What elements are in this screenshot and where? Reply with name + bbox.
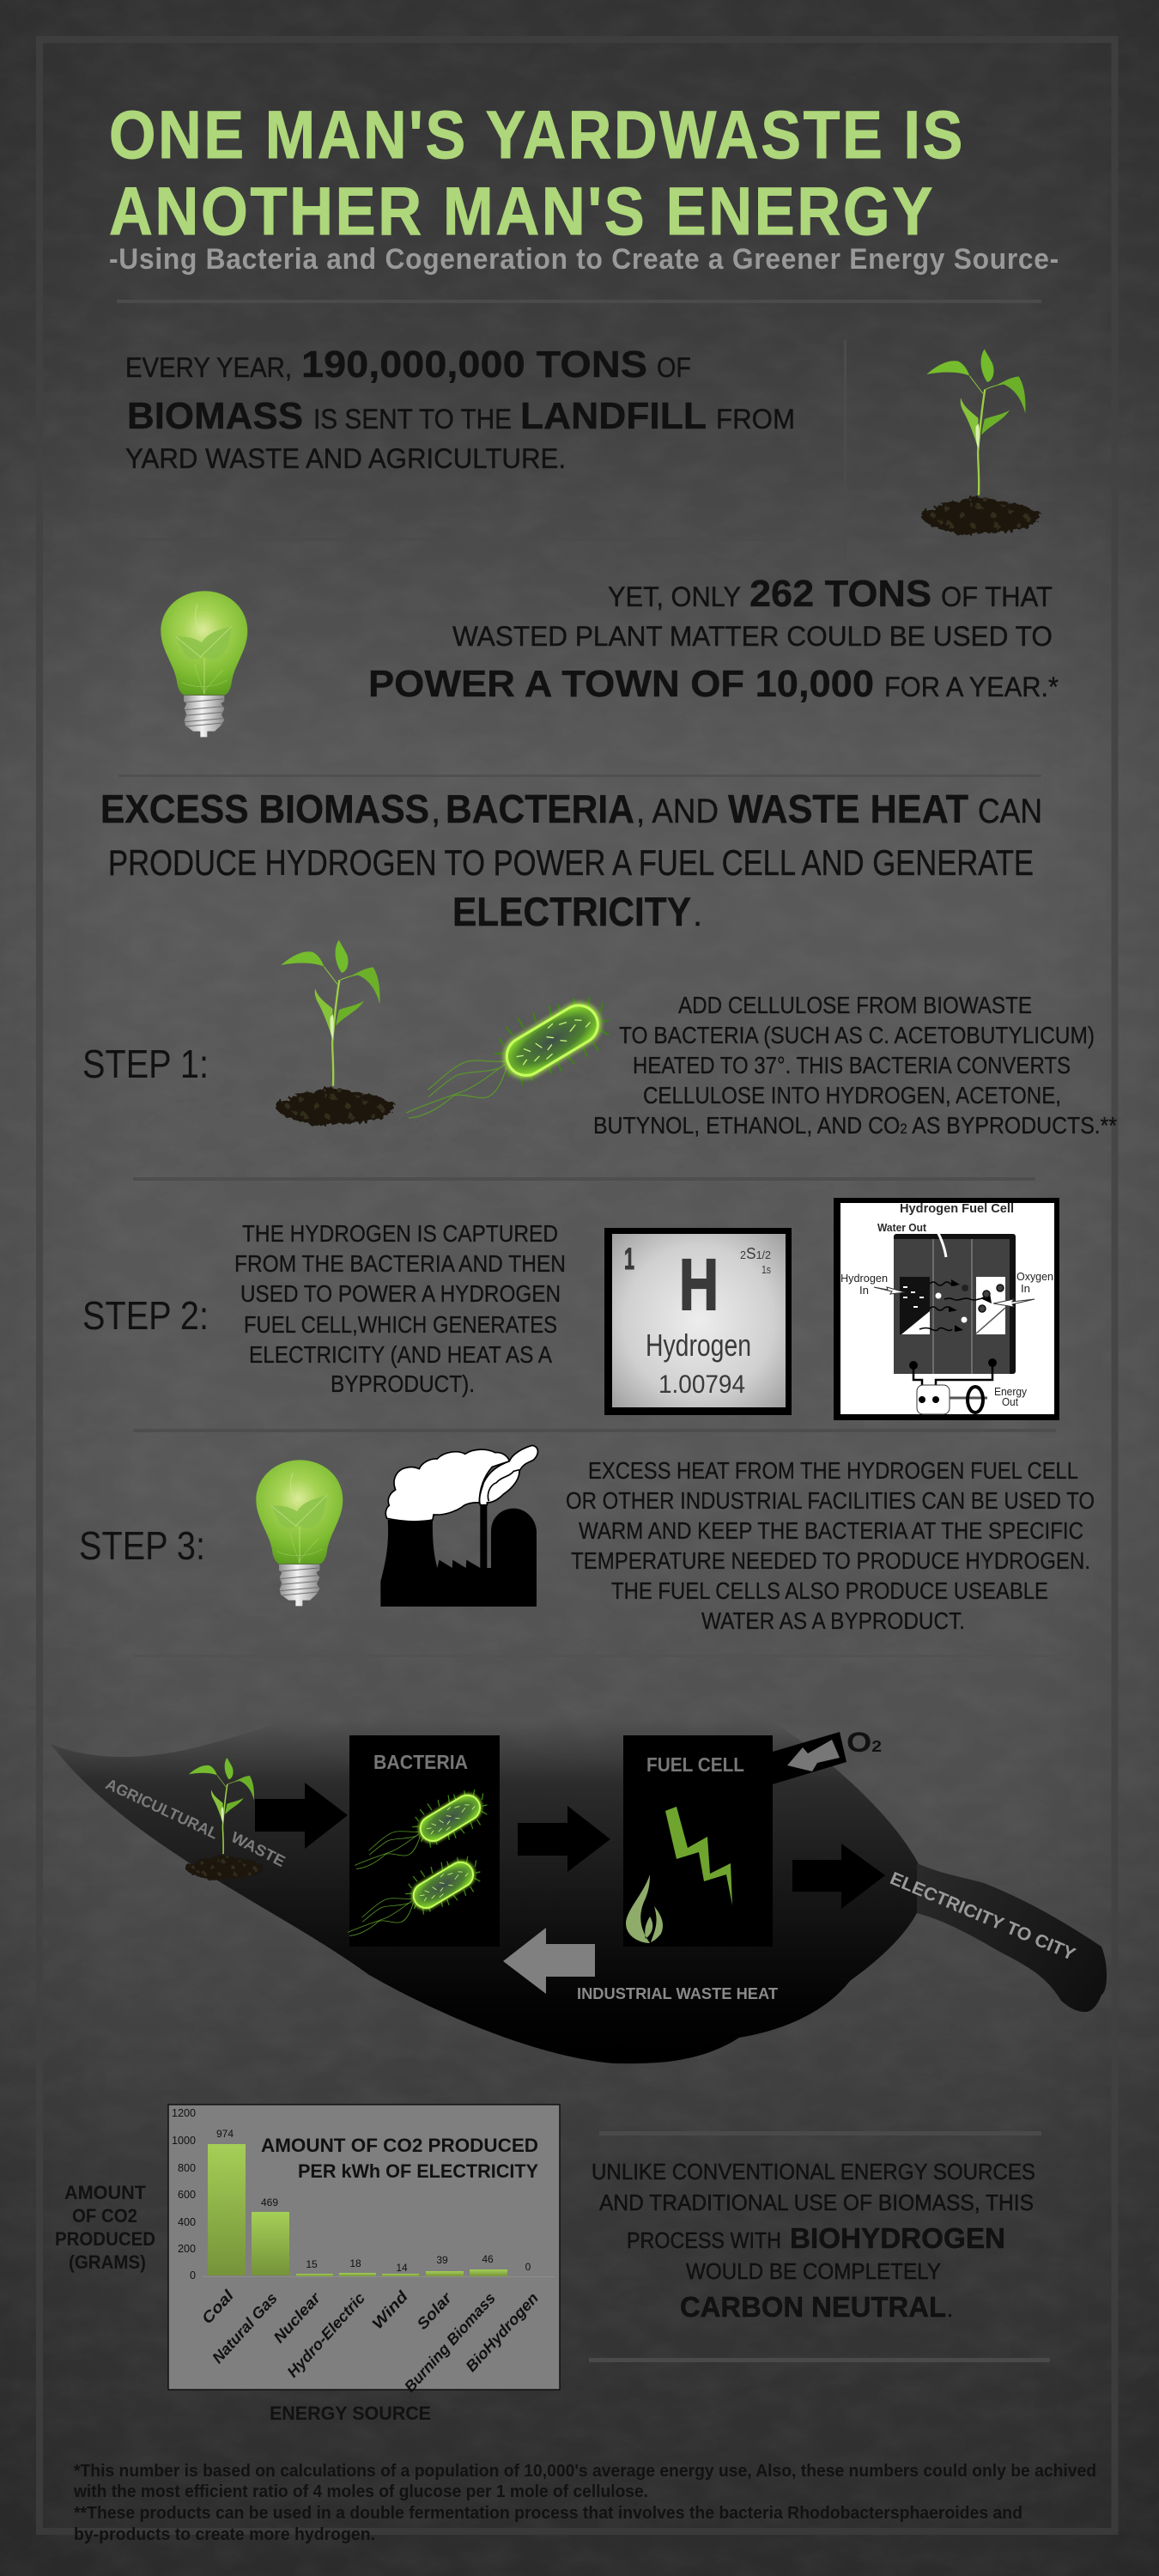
step 2 text: FROM THE BACTERIA AND THEN bbox=[234, 1250, 566, 1277]
footnotes: *This number is based on calculations of a population of 10,000's average energy use, Also, these numbers could only be achived bbox=[74, 2462, 1096, 2481]
text block: landfill statistic: 190,000,000 TONS bbox=[301, 343, 647, 386]
y axis label: OF CO2 bbox=[72, 2205, 137, 2227]
heading: process summary bbox=[100, 787, 1042, 934]
value labels: 974 bbox=[216, 2128, 234, 2140]
text block: landfill statistic: IS SENT TO THE bbox=[313, 404, 512, 434]
label: agricultural waste bbox=[103, 1775, 288, 1870]
icon: seedling on leaf bbox=[185, 1758, 264, 1880]
step 1 label: STEP 1: bbox=[82, 1042, 209, 1086]
icon: bacterium bbox=[406, 994, 609, 1118]
title: ONE MAN'S YARDWASTE IS bbox=[109, 96, 965, 173]
text block: 262 tons statistic: FOR A YEAR.* bbox=[884, 671, 1059, 702]
bar chart: CO2 per kWh bbox=[168, 2105, 560, 2396]
oxygen inlet bbox=[773, 1727, 882, 1784]
hydrogen fuel cell diagram: Oxygen bbox=[1016, 1270, 1053, 1283]
y axis label: (GRAMS) bbox=[69, 2251, 146, 2273]
text block: 262 tons statistic bbox=[368, 573, 1059, 705]
step 3 text: THE FUEL CELLS ALSO PRODUCE USEABLE bbox=[611, 1577, 1048, 1604]
heading: process summary: , AND bbox=[636, 793, 719, 830]
text block: 262 tons statistic: WASTED PLANT MATTER COULD BE USED TO bbox=[452, 621, 1053, 652]
heading: process summary: EXCESS BIOMASS bbox=[100, 787, 429, 831]
oxygen inlet: O2 bbox=[846, 1727, 882, 1758]
step 2 text bbox=[234, 1220, 566, 1397]
chart title: PER kWh OF ELECTRICITY bbox=[298, 2160, 538, 2182]
step 1 text: BUTYNOL, ETHANOL, AND CO2 AS BYPRODUCTS.** bbox=[593, 1112, 1117, 1139]
icon: green light bulb bbox=[161, 591, 247, 737]
subtitle: -Using Bacteria and Cogeneration to Create a Greener Energy Source- bbox=[109, 243, 1059, 276]
hydrogen fuel cell diagram: In bbox=[1021, 1282, 1030, 1295]
footnotes: by-products to create more hydrogen. bbox=[74, 2525, 375, 2544]
value labels: 469 bbox=[261, 2196, 278, 2208]
text block: landfill statistic: YARD WASTE AND AGRICULTURE. bbox=[125, 443, 566, 474]
axis ticks: 400 bbox=[178, 2215, 196, 2228]
leaf stem bbox=[917, 1863, 1107, 2012]
axis ticks: 1000 bbox=[172, 2134, 196, 2147]
hydrogen fuel cell diagram: Energy bbox=[994, 1385, 1027, 1398]
step 1 text: HEATED TO 37°. THIS BACTERIA CONVERTS bbox=[633, 1052, 1071, 1078]
value labels: 46 bbox=[482, 2253, 494, 2265]
step 1 text: CELLULOSE INTO HYDROGEN, ACETONE, bbox=[643, 1082, 1061, 1109]
category labels bbox=[198, 2286, 542, 2396]
step 3 text: TEMPERATURE NEEDED TO PRODUCE HYDROGEN. bbox=[571, 1547, 1090, 1574]
category labels: Natural Gas bbox=[209, 2289, 281, 2366]
footnotes: **These products can be used in a double fermentation process that involves the bacteria Rhodobactersphaeroides and bbox=[74, 2504, 1022, 2523]
icon: factory with smoke bbox=[380, 1445, 537, 1607]
panel: bacteria: BACTERIA bbox=[373, 1751, 468, 1773]
category labels: Wind bbox=[368, 2287, 412, 2332]
step 2 text: FUEL CELL,WHICH GENERATES bbox=[244, 1311, 557, 1338]
category labels: Hydro-Electric bbox=[283, 2289, 368, 2381]
footnotes bbox=[73, 2462, 1096, 2544]
text block: landfill statistic: LANDFILL bbox=[520, 395, 707, 437]
label: industrial waste heat: INDUSTRIAL WASTE HEAT bbox=[577, 1985, 778, 2002]
heading: process summary: . bbox=[693, 896, 702, 933]
step 2 label: STEP 2: bbox=[82, 1293, 209, 1338]
text block: 262 tons statistic: POWER A TOWN OF 10,000 bbox=[368, 663, 874, 705]
label: agricultural waste: AGRICULTURAL bbox=[103, 1775, 221, 1843]
hydrogen periodic table tile: 2S1/2 bbox=[740, 1245, 771, 1262]
value labels bbox=[216, 2128, 531, 2274]
y axis label bbox=[55, 2182, 155, 2273]
hydrogen periodic table tile: H bbox=[679, 1244, 719, 1325]
value labels: 18 bbox=[349, 2257, 361, 2269]
arrow: industrial waste heat bbox=[503, 1928, 595, 1994]
hydrogen fuel cell diagram: In bbox=[859, 1284, 869, 1297]
text block: carbon neutral: AND TRADITIONAL USE OF BIOMASS, THIS bbox=[599, 2190, 1034, 2215]
footnotes: with the most efficient ratio of 4 moles of glucose per 1 mole of cellulose. bbox=[73, 2482, 648, 2501]
hydrogen periodic table tile: 1.00794 bbox=[658, 1370, 745, 1399]
hydrogen periodic table tile: 1s bbox=[762, 1263, 771, 1276]
heading: process summary: CAN bbox=[978, 793, 1042, 830]
panel: fuel cell: FUEL CELL bbox=[646, 1753, 744, 1776]
heading: process summary: WASTE HEAT bbox=[728, 787, 968, 831]
value labels: 0 bbox=[525, 2261, 531, 2273]
text block: 262 tons statistic: YET, ONLY bbox=[608, 581, 741, 612]
text block: 262 tons statistic: OF THAT bbox=[941, 581, 1053, 612]
text block: landfill statistic: FROM bbox=[716, 404, 795, 434]
step 2 text: BYPRODUCT). bbox=[331, 1370, 475, 1397]
step 3 text bbox=[566, 1457, 1095, 1634]
category labels: Coal bbox=[198, 2286, 238, 2327]
hydrogen fuel cell diagram bbox=[834, 1198, 1059, 1420]
hydrogen periodic table tile: 1 bbox=[624, 1242, 634, 1276]
category labels: BioHydrogen bbox=[462, 2289, 542, 2375]
text block: carbon neutral: BIOHYDROGEN bbox=[790, 2222, 1005, 2254]
heading: process summary: BACTERIA bbox=[446, 787, 634, 831]
label: electricity to city: ELECTRICITY TO CITY bbox=[887, 1868, 1078, 1965]
text block: landfill statistic: OF bbox=[657, 352, 691, 383]
axis ticks: 0 bbox=[190, 2269, 196, 2281]
y axis label: PRODUCED bbox=[55, 2228, 155, 2250]
category labels: Burning Biomass bbox=[401, 2289, 499, 2396]
hydrogen fuel cell diagram: Hydrogen bbox=[840, 1272, 888, 1285]
text block: carbon neutral: PROCESS WITH bbox=[627, 2227, 781, 2253]
x axis label: ENERGY SOURCE bbox=[270, 2403, 431, 2424]
heading: process summary: ELECTRICITY bbox=[452, 889, 691, 934]
step 3 text: WATER AS A BYPRODUCT. bbox=[701, 1607, 965, 1634]
step 3 text: EXCESS HEAT FROM THE HYDROGEN FUEL CELL bbox=[588, 1457, 1078, 1484]
category labels: Solar bbox=[414, 2288, 456, 2333]
arrow: bacteria to fuel cell bbox=[518, 1806, 610, 1872]
step 1 text bbox=[593, 992, 1117, 1139]
title: ANOTHER MAN'S ENERGY bbox=[109, 173, 935, 249]
label: agricultural waste: WASTE bbox=[228, 1828, 288, 1870]
step 2 text: ELECTRICITY (AND HEAT AS A bbox=[249, 1341, 552, 1368]
text block: landfill statistic: EVERY YEAR, bbox=[125, 352, 292, 383]
hydrogen periodic table tile: Hydrogen bbox=[646, 1327, 751, 1363]
title bbox=[109, 96, 965, 249]
text block: carbon neutral: CARBON NEUTRAL bbox=[680, 2291, 946, 2323]
text block: carbon neutral: . bbox=[947, 2296, 953, 2322]
axis ticks: 800 bbox=[178, 2161, 196, 2174]
step 2 text: THE HYDROGEN IS CAPTURED bbox=[242, 1220, 558, 1247]
axis ticks bbox=[172, 2106, 196, 2281]
text block: carbon neutral bbox=[592, 2159, 1035, 2323]
chart title: AMOUNT OF CO2 PRODUCED bbox=[261, 2135, 538, 2156]
icon: seedling in soil bbox=[275, 940, 396, 1126]
icon: seedling in soil bbox=[920, 349, 1041, 535]
arrow: waste to bacteria bbox=[255, 1783, 348, 1849]
text block: landfill statistic bbox=[125, 343, 795, 474]
y axis label: AMOUNT bbox=[64, 2182, 147, 2203]
heading: process summary: , bbox=[431, 793, 440, 830]
text block: carbon neutral: WOULD BE COMPLETELY bbox=[686, 2258, 941, 2284]
hydrogen fuel cell diagram: Hydrogen Fuel Cell bbox=[900, 1201, 1014, 1216]
value labels: 15 bbox=[306, 2258, 318, 2270]
process diagram bbox=[51, 1683, 1107, 2063]
step 2 text: USED TO POWER A HYDROGEN bbox=[240, 1280, 561, 1307]
panel: fuel cell bbox=[623, 1735, 773, 1947]
step 1 text: TO BACTERIA (SUCH AS C. ACETOBUTYLICUM) bbox=[619, 1022, 1095, 1048]
axis ticks: 200 bbox=[178, 2242, 196, 2255]
text block: 262 tons statistic: 262 TONS bbox=[749, 573, 931, 615]
value labels: 14 bbox=[396, 2262, 408, 2274]
hydrogen fuel cell diagram: Water Out bbox=[877, 1221, 927, 1234]
text block: landfill statistic: BIOMASS bbox=[127, 395, 303, 437]
leaf body bbox=[51, 1683, 921, 2063]
step 1 text: ADD CELLULOSE FROM BIOWASTE bbox=[678, 992, 1032, 1018]
arrow: fuel cell to electricity bbox=[792, 1844, 885, 1909]
axis ticks: 1200 bbox=[172, 2106, 196, 2119]
hydrogen fuel cell diagram: Out bbox=[1002, 1395, 1018, 1408]
step 3 text: WARM AND KEEP THE BACTERIA AT THE SPECIFIC bbox=[579, 1517, 1083, 1544]
panel: bacteria bbox=[348, 1735, 500, 1947]
icon: green light bulb bbox=[256, 1460, 343, 1606]
category labels: Nuclear bbox=[270, 2289, 325, 2346]
hydrogen periodic table tile bbox=[604, 1228, 792, 1415]
text block: carbon neutral: UNLIKE CONVENTIONAL ENERGY SOURCES bbox=[592, 2159, 1035, 2184]
chart title bbox=[261, 2135, 538, 2182]
step 3 label: STEP 3: bbox=[79, 1523, 205, 1568]
axis ticks: 600 bbox=[178, 2188, 196, 2201]
value labels: 39 bbox=[436, 2254, 448, 2266]
bars bbox=[208, 2144, 507, 2276]
